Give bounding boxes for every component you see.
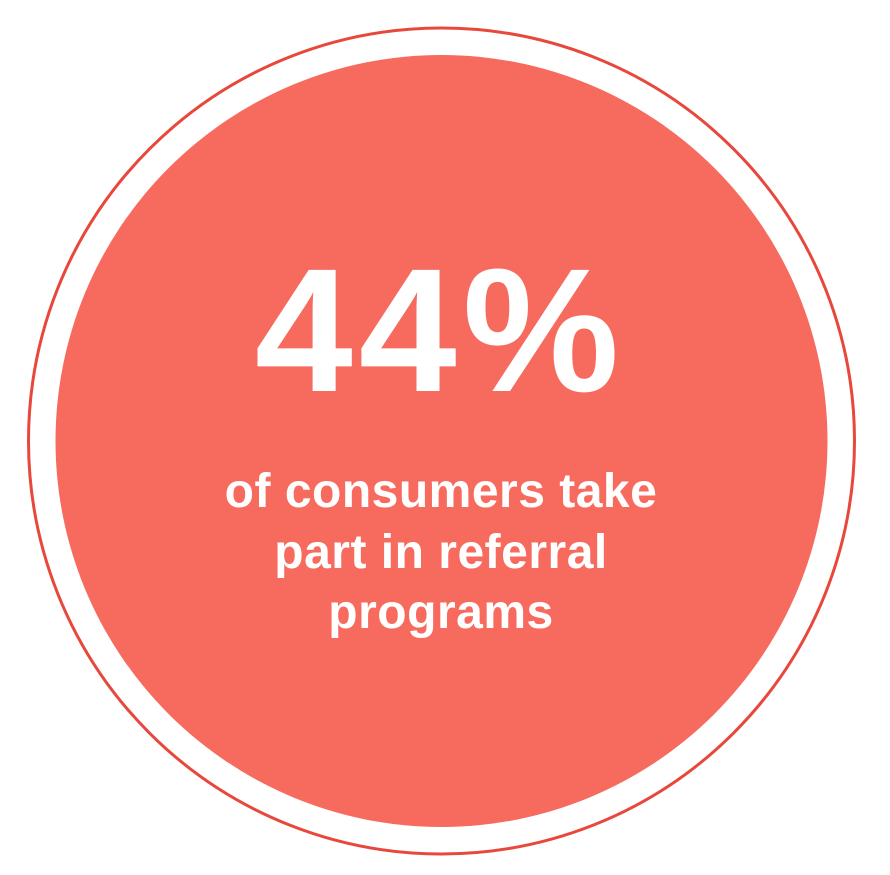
caption text: programs: [328, 586, 554, 639]
headline number: 44%: [255, 233, 625, 429]
caption text: part in referral: [274, 526, 608, 579]
caption text: of consumers take: [225, 465, 657, 518]
caption text: [225, 465, 657, 639]
filled stat circle: [56, 55, 828, 827]
